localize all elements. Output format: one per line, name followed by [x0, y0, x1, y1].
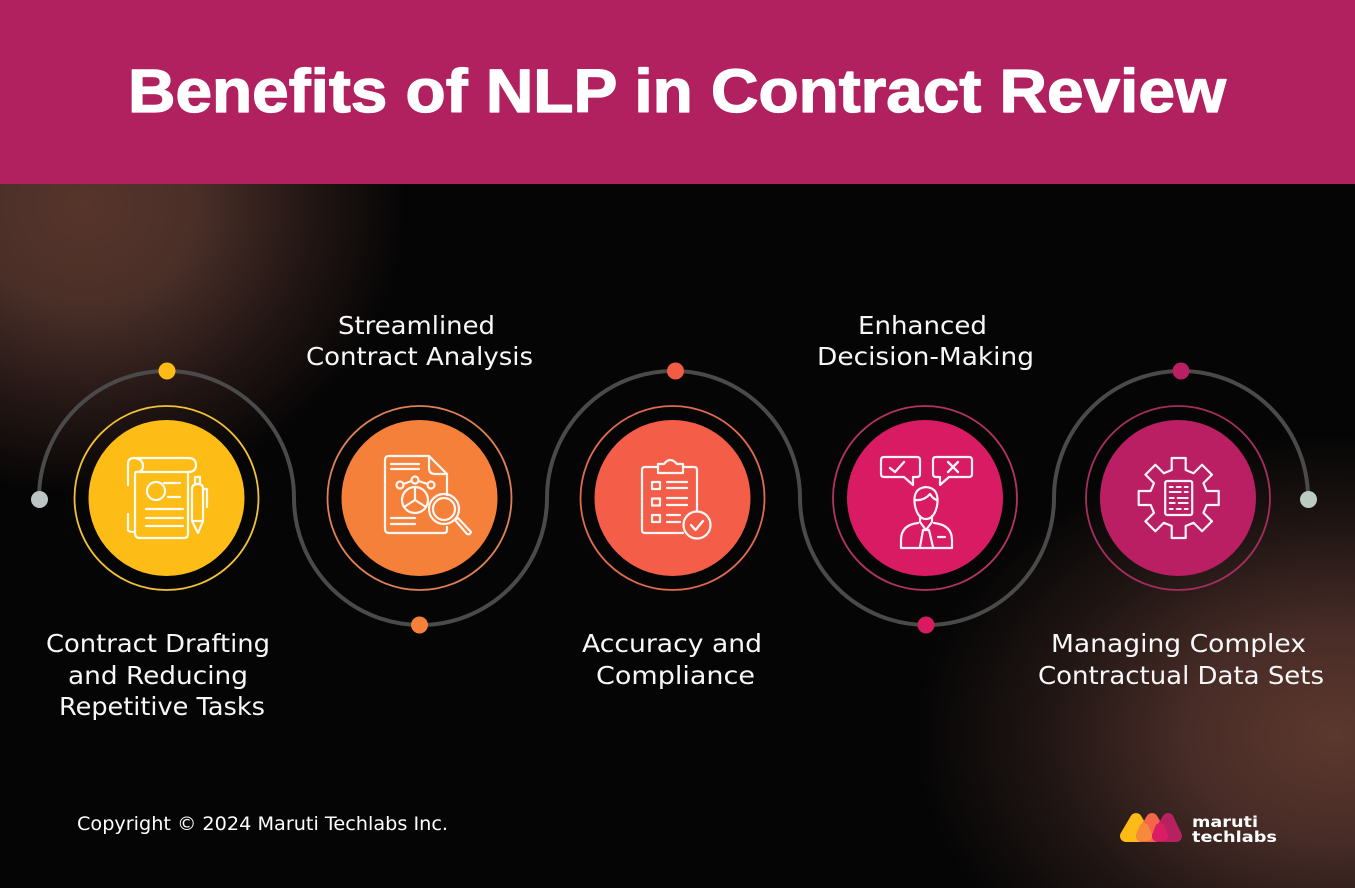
marker dot 4 — [918, 616, 934, 634]
disc 1 — [88, 420, 244, 576]
step 1: contract drafting — [74, 362, 258, 590]
logo — [1126, 813, 1277, 846]
label: accuracy and compliance — [582, 629, 762, 690]
label: accuracy and compliance: Compliance — [596, 661, 755, 690]
label: contract drafting: and Reducing — [68, 661, 248, 690]
disc 4 — [847, 420, 1003, 576]
logo wordmark: maruti — [1192, 813, 1258, 831]
icon: person weighing decision — [881, 457, 972, 548]
label: streamlined contract analysis: Contract Analysis — [306, 342, 533, 371]
disc 2 — [342, 420, 498, 576]
label: managing complex contractual data sets: Managing Complex — [1051, 629, 1306, 658]
icon: checklist clipboard — [642, 460, 710, 538]
step 5: managing complex contractual data sets — [1086, 362, 1270, 590]
label: contract drafting: Repetitive Tasks — [59, 692, 265, 721]
logo wordmark: techlabs — [1192, 828, 1277, 846]
ring 3 — [580, 406, 764, 590]
label: enhanced decision-making — [817, 311, 1034, 371]
icon: document with magnifier — [385, 456, 471, 534]
label: accuracy and compliance: Accuracy and — [582, 629, 762, 658]
copyright: Copyright © 2024 Maruti Techlabs Inc. — [77, 813, 448, 835]
label: contract drafting — [46, 629, 270, 721]
label: streamlined contract analysis: Streamlined — [338, 311, 495, 340]
track end dot — [1300, 491, 1317, 508]
disc 5 — [1100, 420, 1256, 576]
ring 4 — [833, 406, 1017, 590]
winding track line — [39, 371, 1308, 625]
marker dot 3 — [667, 362, 684, 380]
marker dot 2 — [411, 616, 428, 634]
step 4: enhanced decision-making — [833, 406, 1017, 634]
step 3: accuracy and compliance — [580, 362, 764, 590]
icon: gear with data sheet — [1139, 458, 1219, 538]
label: enhanced decision-making: Enhanced — [858, 311, 987, 340]
logo wordmark — [1192, 813, 1277, 846]
marker dot 1 — [158, 362, 176, 380]
header band — [0, 0, 1355, 184]
ring 5 — [1086, 406, 1270, 590]
step 2: streamlined contract analysis — [328, 406, 512, 634]
icon: contract scroll and pen — [128, 458, 207, 538]
marker dot 5 — [1172, 362, 1190, 380]
ring 2 — [328, 406, 512, 590]
ring 1 — [74, 406, 258, 590]
title: Benefits of NLP in Contract Review — [128, 57, 1227, 125]
disc 3 — [594, 420, 750, 576]
label: contract drafting: Contract Drafting — [46, 629, 270, 658]
label: managing complex contractual data sets: Contractual Data Sets — [1038, 661, 1324, 690]
label: streamlined contract analysis — [306, 311, 533, 371]
logo mark — [1126, 819, 1176, 836]
track start dot — [31, 491, 48, 508]
label: managing complex contractual data sets — [1038, 629, 1324, 690]
label: enhanced decision-making: Decision-Making — [817, 342, 1034, 371]
